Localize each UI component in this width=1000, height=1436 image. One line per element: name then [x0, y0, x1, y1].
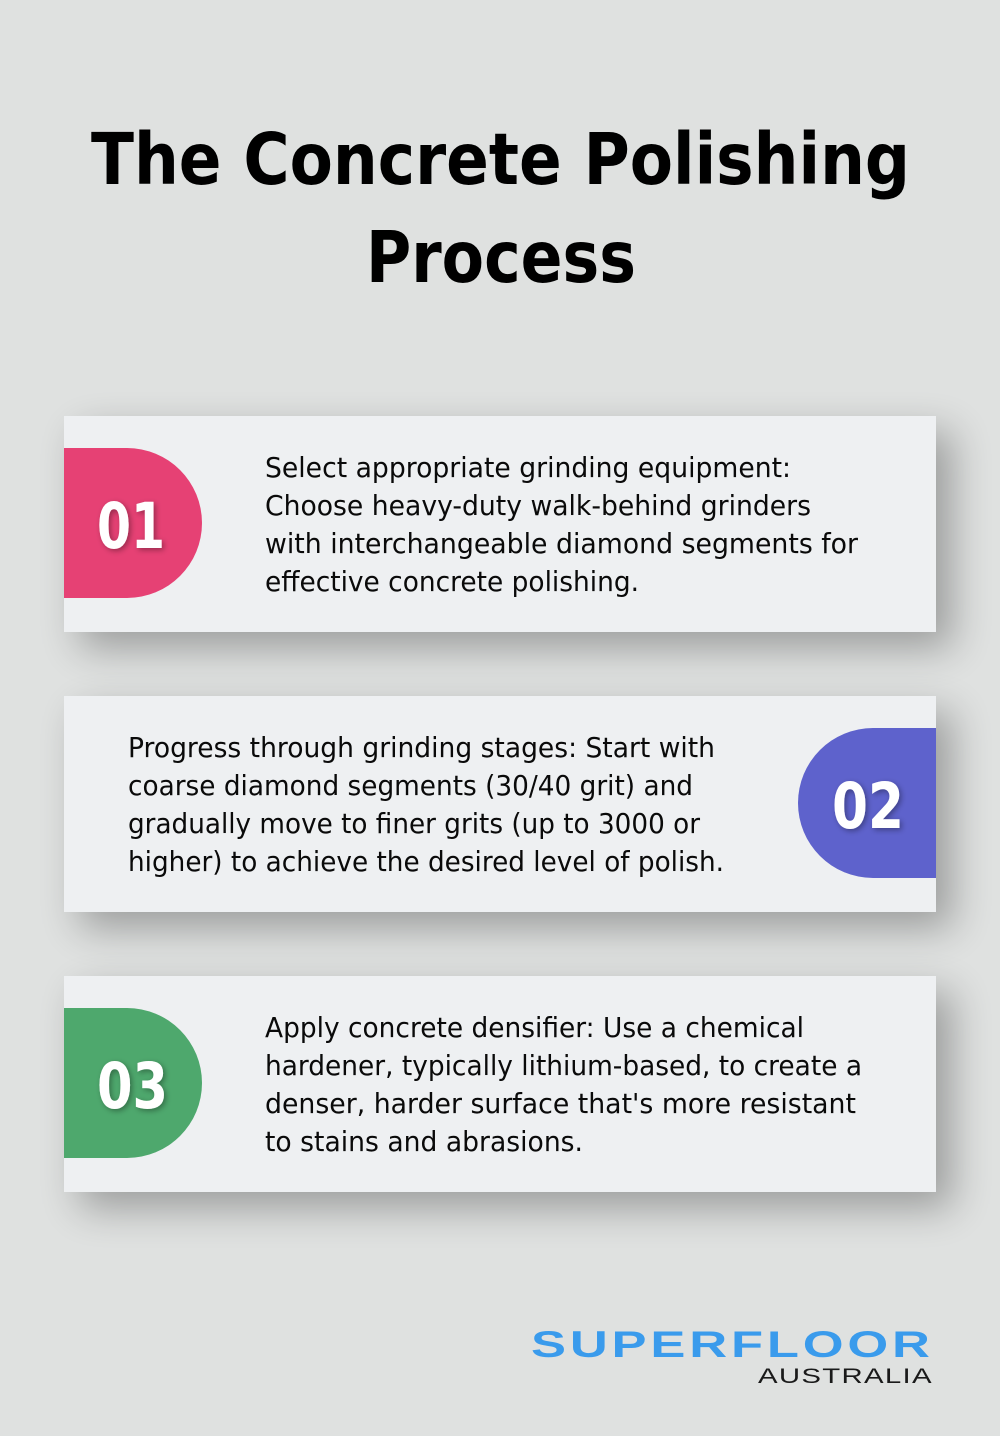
- badge: 02: 02: [832, 770, 904, 843]
- text: step 3 description: to stains and abrasions.: [265, 1126, 583, 1158]
- text: step 2 description: higher) to achieve the desired level of polish.: [128, 846, 724, 878]
- text: step 2 description: [128, 732, 724, 878]
- text: step 1 description: Select appropriate grinding equipment:: [265, 452, 791, 484]
- text: step 3 description: [265, 1012, 862, 1158]
- text: step 1 description: [265, 452, 859, 598]
- badge: 02: [798, 728, 936, 878]
- panel: step 3: [64, 976, 952, 1208]
- text: step 2 description: Progress through grinding stages: Start with: [128, 732, 715, 764]
- text: step 3 description: Apply concrete densifier: Use a chemical: [265, 1012, 804, 1044]
- badge: 01: 01: [97, 490, 165, 563]
- text: step 2 description: gradually move to finer grits (up to 3000 or: [128, 808, 701, 840]
- logo: Superfloor Australia: [531, 1323, 932, 1388]
- badge: 03: [64, 1008, 202, 1158]
- logo: Superfloor Australia: AUSTRALIA: [758, 1365, 932, 1388]
- title: The Concrete Polishing: [91, 118, 910, 201]
- text: step 3 description: denser, harder surface that's more resistant: [265, 1088, 856, 1120]
- text: step 2 description: coarse diamond segments (30/40 grit) and: [128, 770, 693, 802]
- title: [91, 118, 910, 299]
- text: step 1 description: with interchangeable diamond segments for: [265, 528, 859, 560]
- badge: 03: 03: [97, 1050, 168, 1123]
- text: step 1 description: Choose heavy-duty walk-behind grinders: [265, 490, 811, 522]
- text: step 1 description: effective concrete polishing.: [265, 566, 639, 598]
- panel: step 1: [64, 416, 952, 648]
- text: step 3 description: hardener, typically lithium-based, to create a: [265, 1050, 862, 1082]
- title: Process: [366, 216, 636, 299]
- badge: 01: [64, 448, 202, 598]
- logo: Superfloor Australia: SUPERFLOOR: [531, 1323, 930, 1365]
- panel: step 2: [64, 696, 952, 928]
